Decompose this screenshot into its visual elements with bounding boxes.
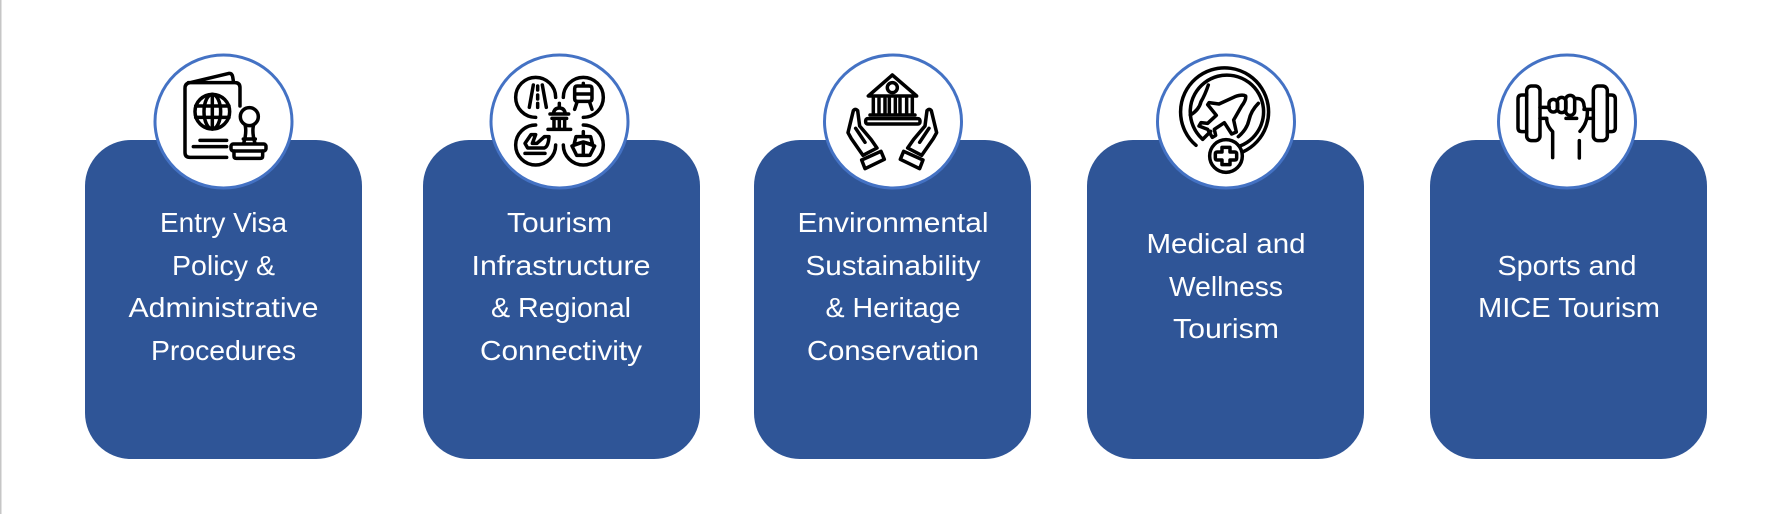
icon: heritage building in open hands (848, 75, 937, 169)
label: Tourism Infrastructure: Connectivity (480, 335, 642, 366)
label: Tourism Infrastructure: & Regional (491, 292, 631, 323)
label: Medical and Wellness: Tourism (1173, 313, 1279, 344)
icon circle (491, 55, 628, 188)
label: Medical and Wellness: Medical and (1146, 228, 1306, 259)
label: Medical and Wellness (1146, 228, 1306, 344)
label: Environmental Sustainability: Environmental (798, 207, 988, 238)
page left edge line (0, 0, 2, 514)
panel: Entry Visa (85, 55, 362, 459)
label: Environmental Sustainability: Sustainability (806, 250, 980, 281)
label: Sports and MICE: Sports and (1498, 250, 1636, 281)
card background (1430, 140, 1707, 459)
label: Sports and MICE (1478, 250, 1660, 323)
icon circle (155, 55, 292, 188)
label: Tourism Infrastructure: Infrastructure (472, 250, 650, 281)
panel: Environmental Sustainability (754, 55, 1031, 459)
icon: passport and stamp (185, 73, 266, 158)
label: Environmental Sustainability (798, 207, 988, 366)
icon circle (1498, 55, 1636, 188)
icon: fist holding a dumbbell (1518, 86, 1615, 158)
panel: Tourism Infrastructure (423, 55, 700, 459)
panel: Sports and MICE (1430, 55, 1707, 459)
label: Entry Visa Policy: Entry Visa (160, 207, 287, 238)
icon circle (824, 55, 962, 188)
label: Entry Visa Policy: Policy & (172, 250, 275, 281)
label: Tourism Infrastructure: Tourism (507, 207, 612, 238)
label: Tourism Infrastructure (472, 207, 650, 366)
panel: Medical and Wellness (1087, 55, 1364, 459)
label: Entry Visa Policy: Procedures (151, 335, 296, 366)
icon circle (1158, 55, 1294, 188)
card background (423, 140, 700, 459)
label: Medical and Wellness: Wellness (1169, 271, 1283, 302)
icon: globe, plane and medical cross (1181, 68, 1269, 172)
label: Entry Visa Policy: Administrative (128, 292, 318, 323)
label: Sports and MICE: MICE Tourism (1478, 292, 1660, 323)
label: Environmental Sustainability: & Heritage (826, 292, 960, 323)
card background (85, 140, 362, 459)
card background (754, 140, 1031, 459)
label: Environmental Sustainability: Conservation (807, 335, 979, 366)
card background (1087, 140, 1364, 459)
label: Entry Visa Policy (128, 207, 318, 366)
icon: road, train, plane, ship around a building (516, 77, 603, 165)
